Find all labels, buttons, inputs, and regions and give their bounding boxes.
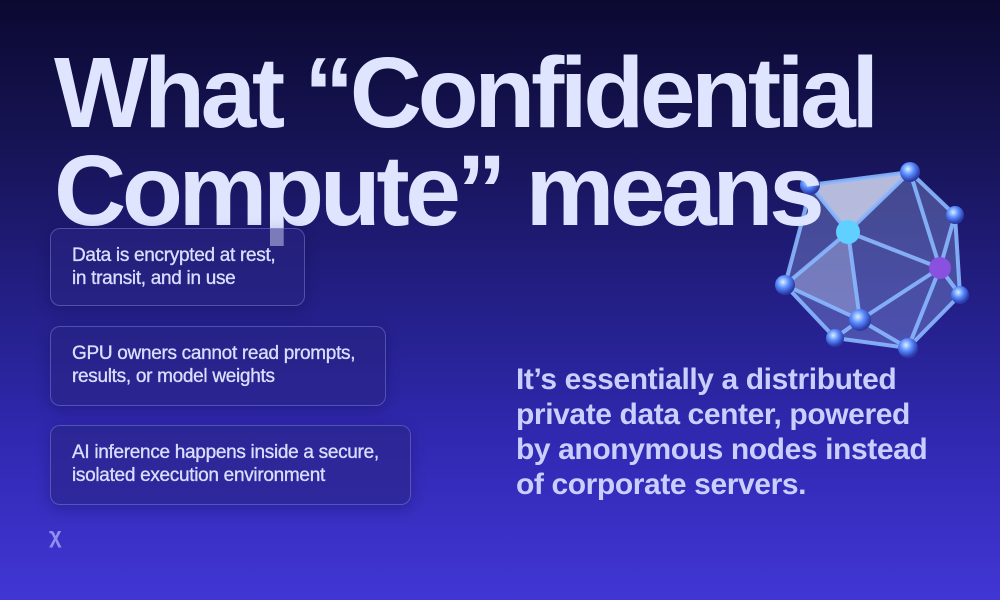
text block: summary: by anonymous nodes instead <box>516 433 927 466</box>
text block: summary <box>516 363 927 501</box>
text block: summary: of corporate servers. <box>516 468 806 501</box>
text block: summary: private data center, powered <box>516 398 910 431</box>
card: secure inference: AI inference happens inside a secure, <box>72 442 379 463</box>
card: GPU owners: results, or model weights <box>72 366 275 387</box>
icon: glass icosahedron <box>775 162 969 358</box>
title: What “Confidential <box>54 37 875 149</box>
card: GPU owners <box>50 326 386 406</box>
card: secure inference <box>50 425 411 505</box>
card: encryption: Data is encrypted at rest, <box>72 245 275 266</box>
title: Compute” means <box>54 135 820 247</box>
card: secure inference: isolated execution environment <box>72 465 325 486</box>
card: encryption: in transit, and in use <box>72 268 235 289</box>
card: encryption <box>50 228 305 306</box>
card: GPU owners: GPU owners cannot read prompts, <box>72 343 355 364</box>
text block: summary: It’s essentially a distributed <box>516 363 896 396</box>
title <box>54 37 875 247</box>
logo: χ <box>49 523 62 548</box>
